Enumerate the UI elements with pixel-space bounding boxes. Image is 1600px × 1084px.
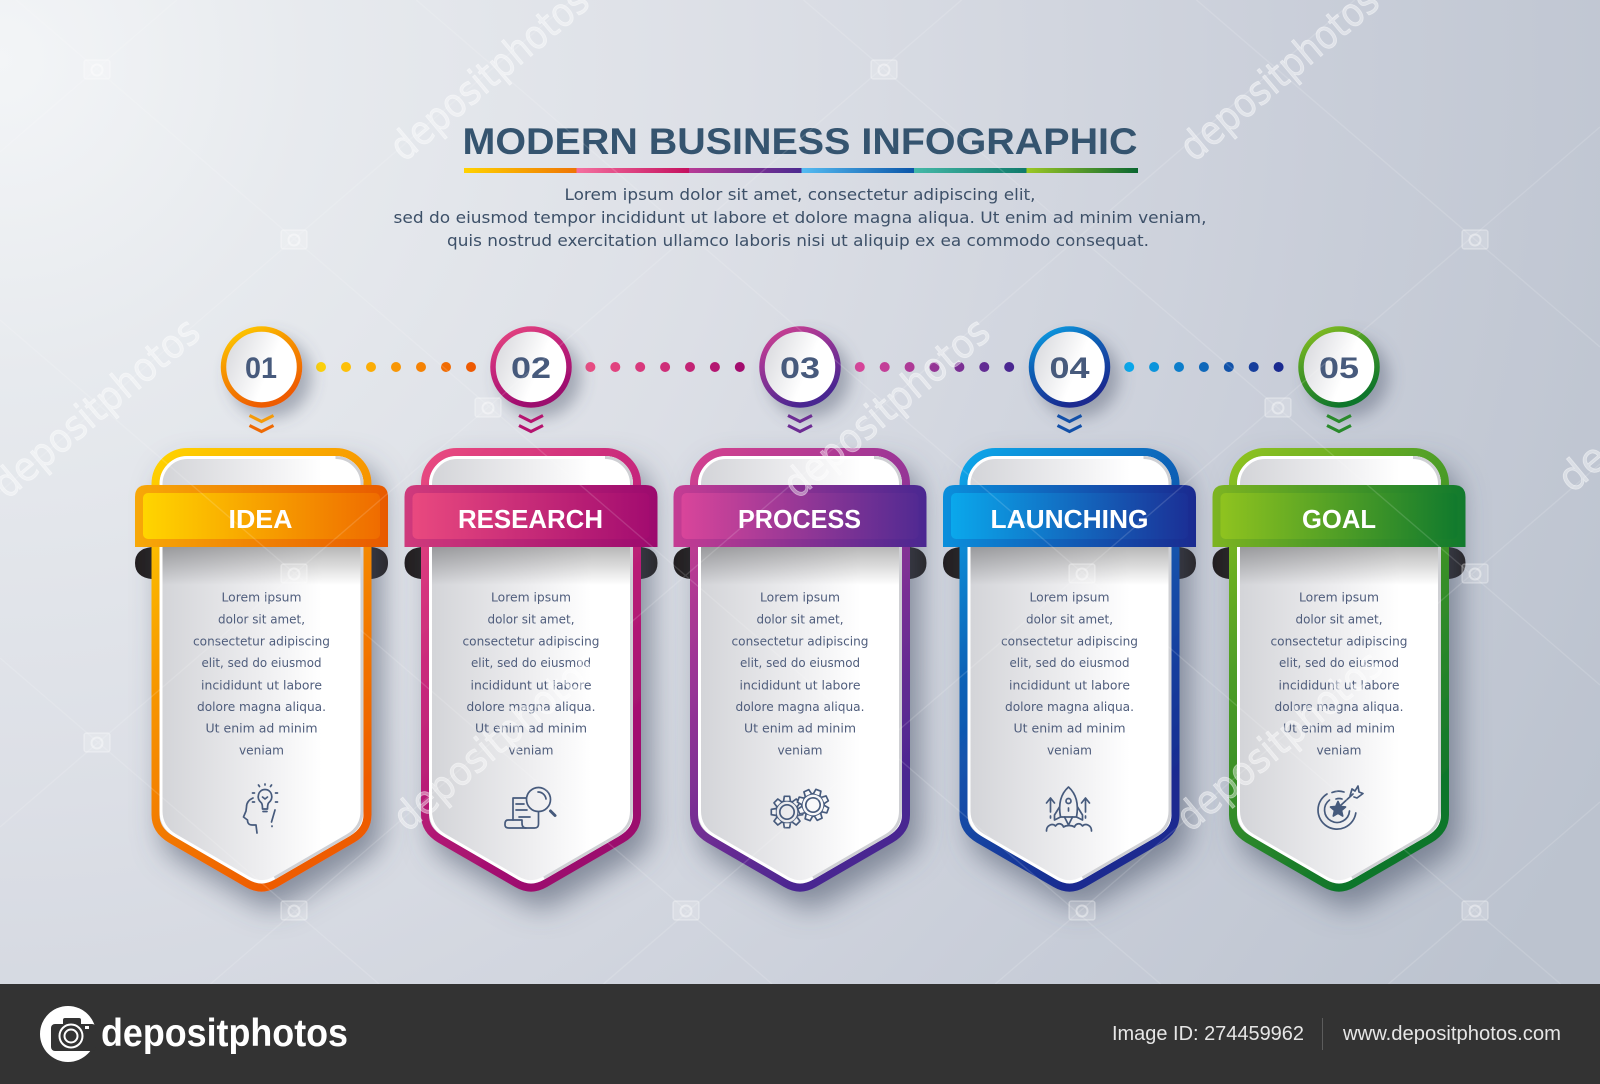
card text: dolore magna aliqua.	[736, 699, 864, 714]
rainbow underline	[464, 168, 1138, 173]
number badge 05: 05	[1319, 352, 1359, 385]
dotted connector 1	[316, 362, 476, 372]
chevron arrows	[1327, 416, 1351, 432]
image id: Image ID: 274459962	[1112, 1023, 1304, 1045]
watermark overlay: depositphotos	[384, 641, 609, 841]
card text: consectetur adipiscing	[732, 634, 868, 649]
number badge 01	[224, 329, 300, 405]
banner	[674, 485, 926, 547]
logo wordmark: depositphotos	[101, 1012, 348, 1055]
card text: Ut enim ad minim	[206, 721, 318, 736]
card text: veniam	[239, 743, 284, 758]
banner: PROCESS	[738, 504, 861, 534]
number badge 01: 01	[245, 352, 277, 385]
card text: Lorem ipsum	[1030, 590, 1110, 605]
icon: rocket	[1046, 787, 1092, 831]
card text: consectetur adipiscing	[1270, 634, 1408, 649]
card text: Lorem ipsum	[760, 590, 840, 605]
card text: consectetur adipiscing	[462, 634, 600, 649]
chevron arrows	[250, 416, 274, 432]
banner: LAUNCHING	[990, 504, 1148, 534]
card text: elit, sed do eiusmod	[1010, 655, 1130, 670]
step 04: LAUNCHING	[943, 329, 1196, 888]
dotted connector 3	[855, 362, 1014, 372]
number badge 05	[1301, 329, 1377, 405]
site url: www.depositphotos.com	[1342, 1023, 1561, 1045]
card text: incididunt ut labore	[1009, 678, 1130, 693]
footer bar	[0, 984, 1600, 1084]
card text: Ut enim ad minim	[744, 721, 856, 736]
card text: Ut enim ad minim	[1014, 721, 1126, 736]
card text: consectetur adipiscing	[193, 634, 330, 649]
watermark overlay: depositphotos	[774, 308, 999, 508]
dotted connector 4	[1124, 362, 1284, 372]
card text	[1001, 590, 1138, 758]
card	[674, 452, 926, 888]
title: MODERN BUSINESS INFOGRAPHIC	[462, 121, 1138, 162]
card text: incididunt ut labore	[740, 678, 861, 693]
card text: dolore magna aliqua.	[1005, 699, 1134, 714]
banner	[135, 485, 388, 547]
number badge 04	[1032, 329, 1108, 405]
card text: incididunt ut labore	[1278, 678, 1400, 693]
number badge 03	[762, 329, 838, 405]
card text: dolore magna aliqua.	[1274, 699, 1404, 714]
card text: veniam	[1316, 743, 1362, 758]
card text: dolor sit amet,	[1026, 612, 1113, 627]
icon: target with arrow	[1318, 786, 1363, 829]
card text: Lorem ipsum	[222, 590, 302, 605]
card text: Lorem ipsum	[491, 590, 571, 605]
card	[404, 452, 658, 888]
card	[135, 452, 388, 888]
card text: veniam	[1047, 743, 1092, 758]
card text: dolor sit amet,	[1296, 612, 1382, 627]
card text: dolore magna aliqua.	[466, 699, 596, 714]
number badge 04: 04	[1050, 352, 1090, 385]
card text: Lorem ipsum	[1299, 590, 1379, 605]
banner	[943, 485, 1196, 547]
number badge 02: 02	[511, 352, 551, 385]
subtitle: sed do eiusmod tempor incididunt ut labore et dolore magna aliqua. Ut enim ad minim veniam,	[394, 208, 1206, 227]
card	[943, 452, 1196, 888]
chevron arrows	[788, 416, 812, 432]
step 03: PROCESS	[674, 329, 926, 888]
card text: Ut enim ad minim	[1283, 721, 1395, 736]
card text: elit, sed do eiusmod	[1279, 655, 1399, 670]
banner: IDEA	[228, 504, 293, 534]
chevron arrows	[519, 416, 543, 432]
card text: elit, sed do eiusmod	[471, 655, 591, 670]
banner	[1212, 485, 1466, 547]
card text: incididunt ut labore	[201, 678, 322, 693]
dotted connector 2	[585, 362, 745, 372]
card text: Ut enim ad minim	[475, 721, 587, 736]
watermark overlay: depositphotos	[1167, 641, 1392, 841]
subtitle: quis nostrud exercitation ullamco laboris nisi ut aliquip ex ea commodo consequat.	[447, 231, 1149, 250]
card text	[1270, 590, 1408, 758]
banner: GOAL	[1302, 504, 1376, 534]
card text: dolor sit amet,	[756, 612, 844, 627]
card text: dolore magna aliqua.	[197, 699, 326, 714]
subtitle: Lorem ipsum dolor sit amet, consectetur adipiscing elit,	[564, 185, 1036, 204]
card text: dolor sit amet,	[488, 612, 574, 627]
icon: gears	[771, 785, 833, 828]
icon: head with light bulb	[244, 784, 278, 833]
chevron arrows	[1058, 416, 1082, 432]
card text	[462, 590, 600, 758]
logo: camera badge	[40, 1006, 96, 1062]
card text: veniam	[778, 743, 822, 758]
subtitle	[394, 185, 1206, 250]
number badge 02	[493, 329, 569, 405]
card text	[732, 590, 868, 758]
card text: incididunt ut labore	[470, 678, 592, 693]
card text: elit, sed do eiusmod	[202, 655, 322, 670]
icon: document with magnifier	[505, 788, 555, 828]
step 02: RESEARCH	[404, 329, 658, 888]
card text: elit, sed do eiusmod	[740, 655, 860, 670]
card text: veniam	[508, 743, 554, 758]
step 05: GOAL	[1212, 329, 1466, 888]
banner	[404, 485, 658, 547]
card	[1212, 452, 1466, 888]
number badge 03: 03	[780, 352, 820, 385]
banner: RESEARCH	[458, 504, 603, 534]
card text: dolor sit amet,	[218, 612, 305, 627]
card text: consectetur adipiscing	[1001, 634, 1138, 649]
card text	[193, 590, 330, 758]
step 01: IDEA	[135, 329, 388, 888]
